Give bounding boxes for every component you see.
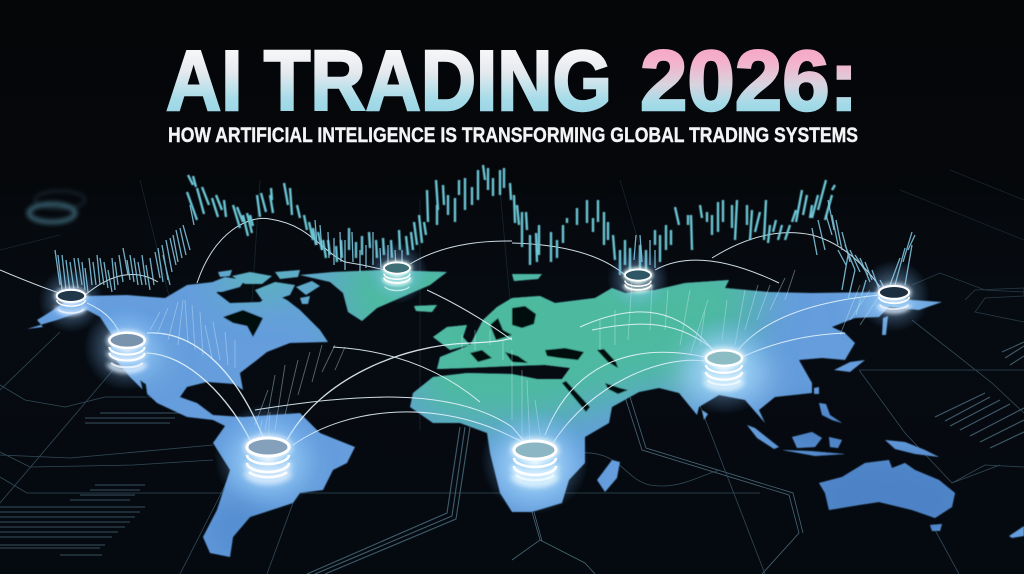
node: Asia	[674, 315, 774, 415]
holographic light streaks over land	[150, 270, 880, 460]
node: Alaska	[38, 267, 104, 333]
subtitle: HOW ARTIFICIAL INTELIGENCE IS TRANSFORMING GLOBAL TRADING SYSTEMS	[168, 123, 858, 147]
teal regions	[215, 245, 770, 425]
node: North America west	[83, 303, 171, 391]
title: AI TRADING: AI TRADING	[166, 34, 612, 129]
title	[166, 34, 858, 147]
darker blue regions	[206, 404, 954, 556]
dark inland seas and bays	[140, 306, 628, 412]
world map	[27, 269, 1024, 558]
node: South America	[214, 403, 322, 511]
node: East Russia	[858, 260, 930, 332]
land base colour	[27, 269, 1024, 558]
node: Africa	[481, 406, 589, 514]
hatched data lines left	[0, 413, 180, 555]
candlestick chart: bright candles	[187, 165, 835, 275]
hatched data lines right	[935, 342, 1024, 448]
circuit board lines	[0, 170, 1024, 574]
blurred ring decoration	[29, 191, 85, 222]
candlestick chart: dim small candles	[55, 200, 915, 315]
arcs connecting trading nodes	[0, 218, 880, 445]
title: 2026: 2026:	[640, 34, 858, 129]
trading nodes	[38, 242, 930, 514]
node: Russia	[607, 249, 669, 311]
land light glows	[87, 291, 935, 500]
node: Greenland	[366, 242, 428, 304]
